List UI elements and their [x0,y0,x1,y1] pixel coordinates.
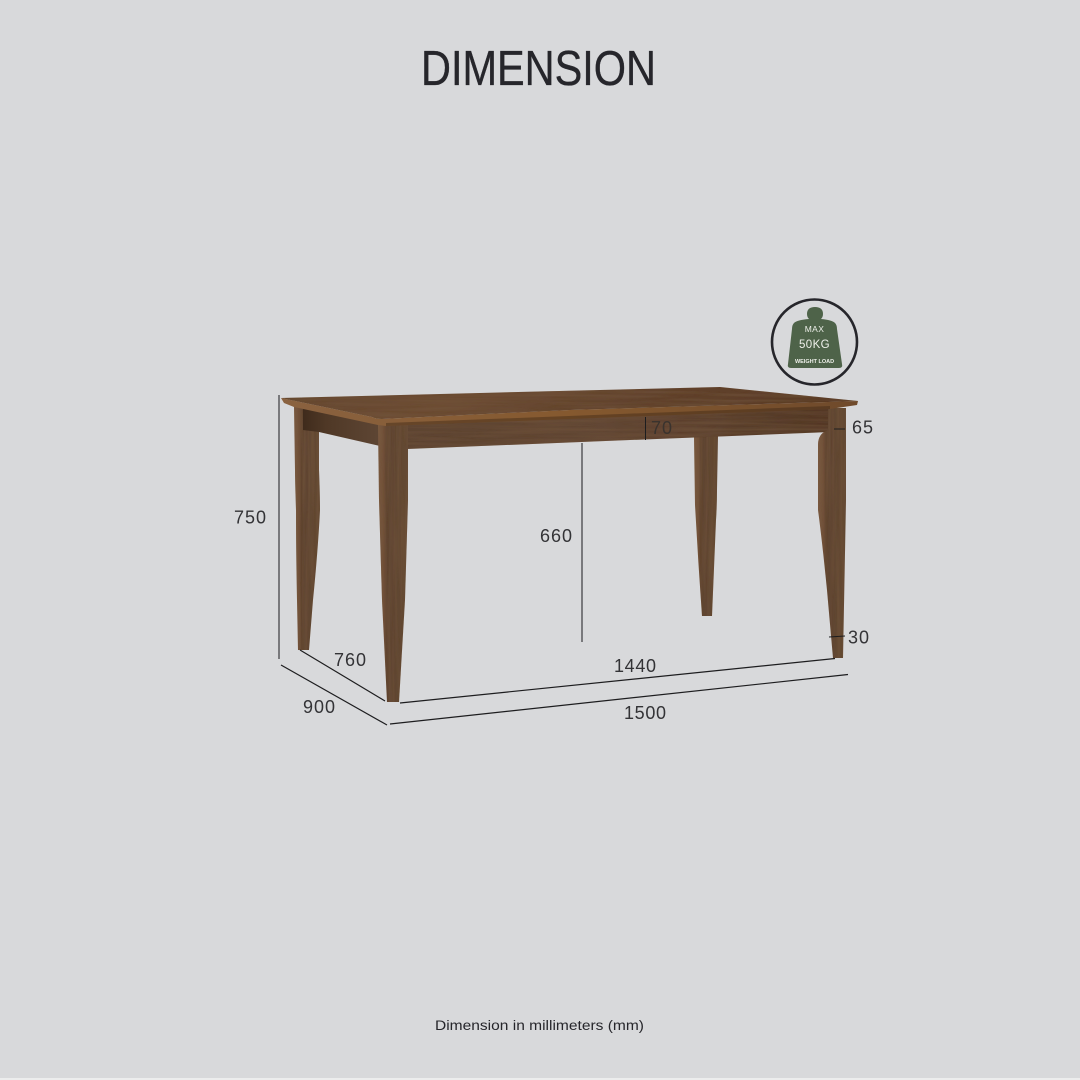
table illustration [281,387,858,702]
dimension: apron 70 [646,417,672,440]
50KG text: 50KG [799,339,830,351]
dimension: inner width 1440: 1440 [614,656,656,676]
dimension: apron 70: 70 [651,418,672,438]
front-right leg [818,408,846,658]
dimension: inner depth 760: 760 [334,650,366,670]
dimension: apron 65 [834,418,873,438]
left side apron [303,408,380,446]
weight load badge [772,300,857,384]
WEIGHT LOAD text: WEIGHT LOAD [795,359,834,365]
dimension: depth 900 [281,665,387,725]
tabletop edge [281,398,858,426]
edge shadow [386,406,830,426]
weight icon [788,307,842,368]
bottom edge highlight [0,1078,1080,1080]
footnote: Dimension in millimeters (mm) [435,1018,644,1033]
dimension: clearance 660: 660 [540,526,572,546]
dimension: inner depth 760 [300,650,385,701]
front apron [380,408,830,449]
dimension: width 1500: 1500 [624,703,666,723]
back-right inner leg [694,436,718,616]
MAX text: MAX [805,324,824,334]
dimension: depth 900: 900 [303,697,335,717]
back-left leg [294,407,320,650]
tabletop surface [281,387,858,419]
badge ring [772,300,857,384]
title: DIMENSION [421,42,656,96]
dimension: inner width 1440 [400,656,835,703]
dimension: width 1500 [390,674,848,724]
dimension: apron 65: 65 [852,418,873,438]
dimension: height 750: 750 [234,508,266,528]
front-left leg [378,425,408,702]
dimension: foot 30 [829,628,869,648]
dimension: foot 30: 30 [848,628,869,648]
